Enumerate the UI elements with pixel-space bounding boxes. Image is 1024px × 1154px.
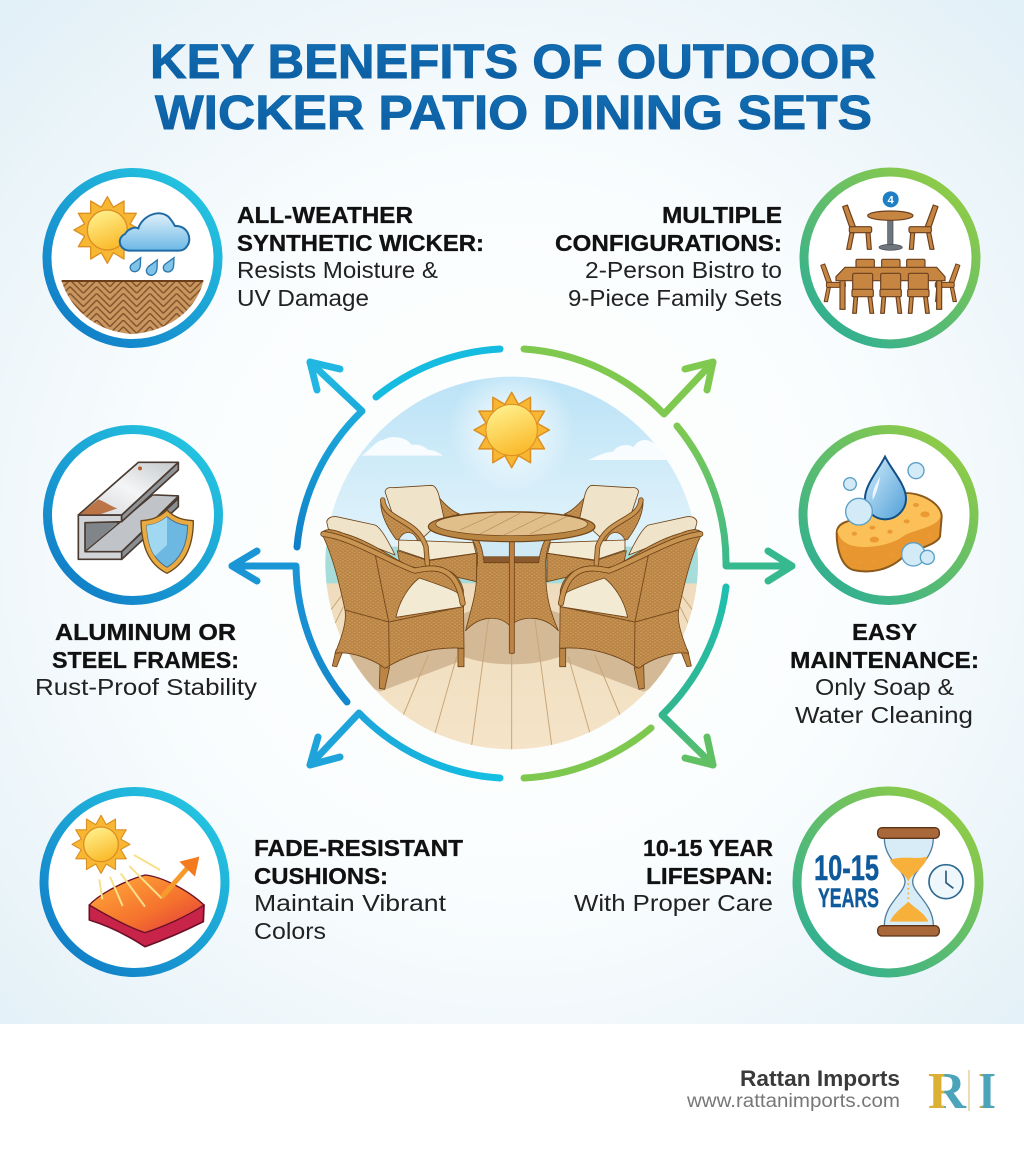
front right chair [560, 517, 702, 689]
sun [474, 392, 549, 468]
central scene: wicker dining set on deck [320, 367, 703, 753]
icon: hourglass, clock and years label: 10-15 [814, 849, 879, 888]
heading and text [574, 835, 773, 916]
heading and text: MAINTENANCE: [790, 647, 979, 673]
sea [320, 547, 703, 585]
heading and text: 10-15 YEAR [643, 835, 773, 861]
icon: sun over red cushion with arrow [72, 815, 204, 947]
deck plank lines [328, 593, 695, 749]
heading and text: Maintain Vibrant [254, 890, 447, 916]
icon ring [803, 430, 974, 600]
icon ring [797, 791, 979, 973]
heading and text: SYNTHETIC WICKER: [237, 230, 484, 256]
title [150, 36, 876, 140]
back left chair [381, 485, 477, 582]
heading and text: UV Damage [237, 285, 369, 311]
panel: easy maintenance [790, 430, 979, 728]
heading and text [790, 619, 979, 728]
logo [928, 1063, 996, 1120]
icon: metal channel and shield [78, 462, 193, 573]
heading and text: 2-Person Bistro to [585, 257, 782, 283]
heading and text: CUSHIONS: [254, 863, 388, 889]
footer [0, 1024, 1024, 1154]
icon ring [44, 792, 225, 972]
heading and text: 9-Piece Family Sets [568, 285, 782, 311]
icon: sun, rain cloud and woven wicker [62, 197, 203, 334]
icon: bistro and family dining sets: 4 [888, 194, 895, 206]
heading and text: Water Cleaning [795, 702, 973, 728]
front left chair [322, 517, 464, 689]
panel: multiple configurations [555, 172, 976, 344]
panel: fade-resistant cushions [44, 792, 463, 972]
table [428, 512, 595, 653]
panel: aluminum or steel frames [35, 430, 258, 700]
logo: I [978, 1063, 996, 1120]
heading and text: With Proper Care [574, 890, 773, 916]
brand name: Rattan Imports [740, 1066, 900, 1091]
heading and text [555, 202, 782, 311]
shadows [349, 610, 674, 692]
website: www.rattanimports.com [686, 1091, 900, 1112]
sky [326, 376, 698, 547]
central arcs and arrows [232, 349, 792, 778]
icon: sponge, water drop and bubbles [837, 457, 942, 571]
back right chair [547, 485, 643, 582]
heading and text: MULTIPLE [662, 202, 782, 228]
heading and text: STEEL FRAMES: [52, 647, 239, 673]
clouds [362, 437, 667, 460]
title: KEY BENEFITS OF OUTDOOR [150, 36, 876, 89]
heading and text: EASY [852, 619, 917, 645]
heading and text [35, 619, 258, 700]
heading and text: Resists Moisture & [237, 257, 438, 283]
icon ring [47, 172, 218, 344]
sun glow [458, 377, 565, 480]
heading and text: ALUMINUM OR [55, 619, 236, 645]
icon: hourglass, clock and years label: YEARS [818, 883, 879, 913]
heading and text: Colors [254, 918, 326, 944]
deck [320, 583, 703, 753]
heading and text: LIFESPAN: [646, 863, 773, 889]
heading and text: Rust-Proof Stability [35, 674, 258, 700]
heading and text: ALL-WEATHER [237, 202, 413, 228]
title: WICKER PATIO DINING SETS [155, 87, 872, 140]
heading and text: FADE-RESISTANT [254, 835, 463, 861]
heading and text: CONFIGURATIONS: [555, 230, 782, 256]
icon: hourglass, clock and years label [814, 828, 963, 936]
icon ring [804, 172, 976, 344]
heading and text [254, 835, 463, 944]
panel: 10-15 year lifespan [574, 791, 979, 973]
heading and text: Only Soap & [815, 674, 954, 700]
logo: R [928, 1063, 967, 1120]
icon ring [48, 430, 218, 600]
panel: all-weather wicker [47, 172, 484, 344]
heading and text [237, 202, 484, 311]
icon: bistro and family dining sets [821, 191, 960, 313]
